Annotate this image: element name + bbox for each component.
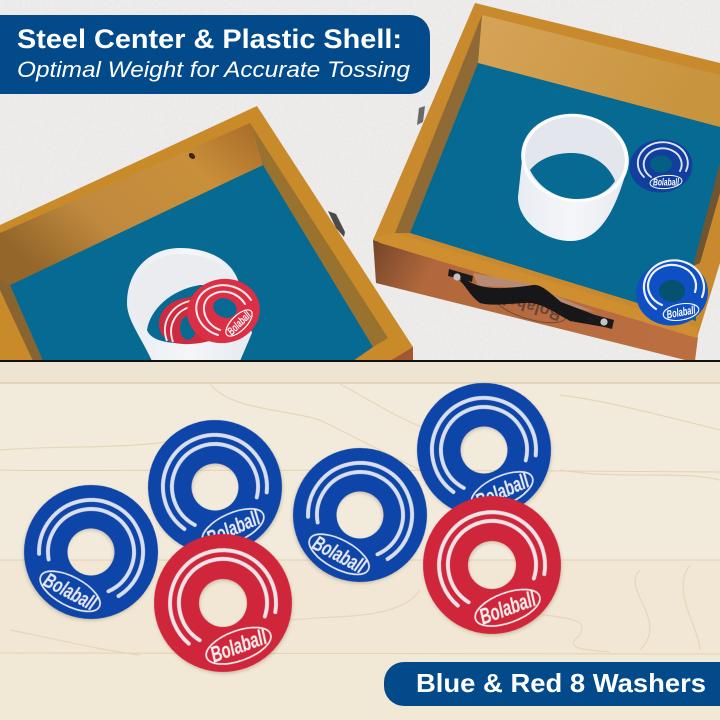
rim of left box xyxy=(0,106,413,361)
caption text: Blue & Red 8 Washers xyxy=(416,668,706,698)
red washer in front xyxy=(182,273,265,349)
title subheading: Optimal Weight for Accurate Tossing xyxy=(17,57,411,82)
white cup in right box xyxy=(515,107,635,241)
handle strap xyxy=(448,269,614,329)
front rim highlight of right box xyxy=(373,233,697,338)
washer set xyxy=(0,362,580,691)
title heading: Steel Center & Plastic Shell: xyxy=(17,24,402,54)
burned logo on box front: Bolaball xyxy=(496,287,564,325)
blue washer B xyxy=(127,399,303,575)
right wall of right box xyxy=(693,163,720,266)
front corner of left box xyxy=(353,339,413,361)
red washer behind xyxy=(159,297,227,344)
hardware hinge on right box xyxy=(417,106,425,125)
felt floor of left box xyxy=(10,165,373,361)
felt visible through cup xyxy=(530,153,615,199)
back wall of right box xyxy=(478,15,720,127)
felt visible through cup xyxy=(147,285,248,343)
blue washer B: Bolaball xyxy=(203,506,264,550)
blue washer C xyxy=(269,424,451,606)
knot in wood xyxy=(188,152,196,160)
top photo background: paper surface xyxy=(0,0,720,361)
lower left wall of left box xyxy=(0,277,43,361)
hardware hinge on left box xyxy=(328,211,345,237)
black divider line xyxy=(0,360,720,362)
blue washer A xyxy=(0,461,182,643)
red washer E xyxy=(135,515,311,691)
small blue washer lower xyxy=(632,256,712,330)
bottom caption banner xyxy=(384,662,720,706)
front face of right box xyxy=(373,240,698,361)
rim of right box xyxy=(373,3,720,338)
blue washer A: Bolaball xyxy=(40,569,100,616)
left washer box xyxy=(0,106,413,361)
small blue washer lower: Bolaball xyxy=(666,304,697,321)
right wall of left box xyxy=(250,123,388,347)
felt floor of right box xyxy=(410,63,720,321)
blue washer D xyxy=(396,362,572,538)
back wall of left box xyxy=(0,123,262,285)
small blue washer upper xyxy=(627,137,695,195)
red washer F: Bolaball xyxy=(476,586,540,629)
small blue washer upper: Bolaball xyxy=(653,178,679,188)
blue washer C: Bolaball xyxy=(309,532,369,579)
bottom photo background: light wood xyxy=(0,362,720,720)
red washer E: Bolaball xyxy=(207,624,271,667)
right washer box xyxy=(373,3,720,361)
handle slot xyxy=(473,273,595,312)
red washer F xyxy=(404,477,580,653)
white cup in left box xyxy=(127,248,252,361)
red washer in front: Bolaball xyxy=(226,309,254,338)
title banner xyxy=(0,15,430,94)
left wall of right box xyxy=(395,15,482,233)
blue washer D: Bolaball xyxy=(472,469,533,513)
